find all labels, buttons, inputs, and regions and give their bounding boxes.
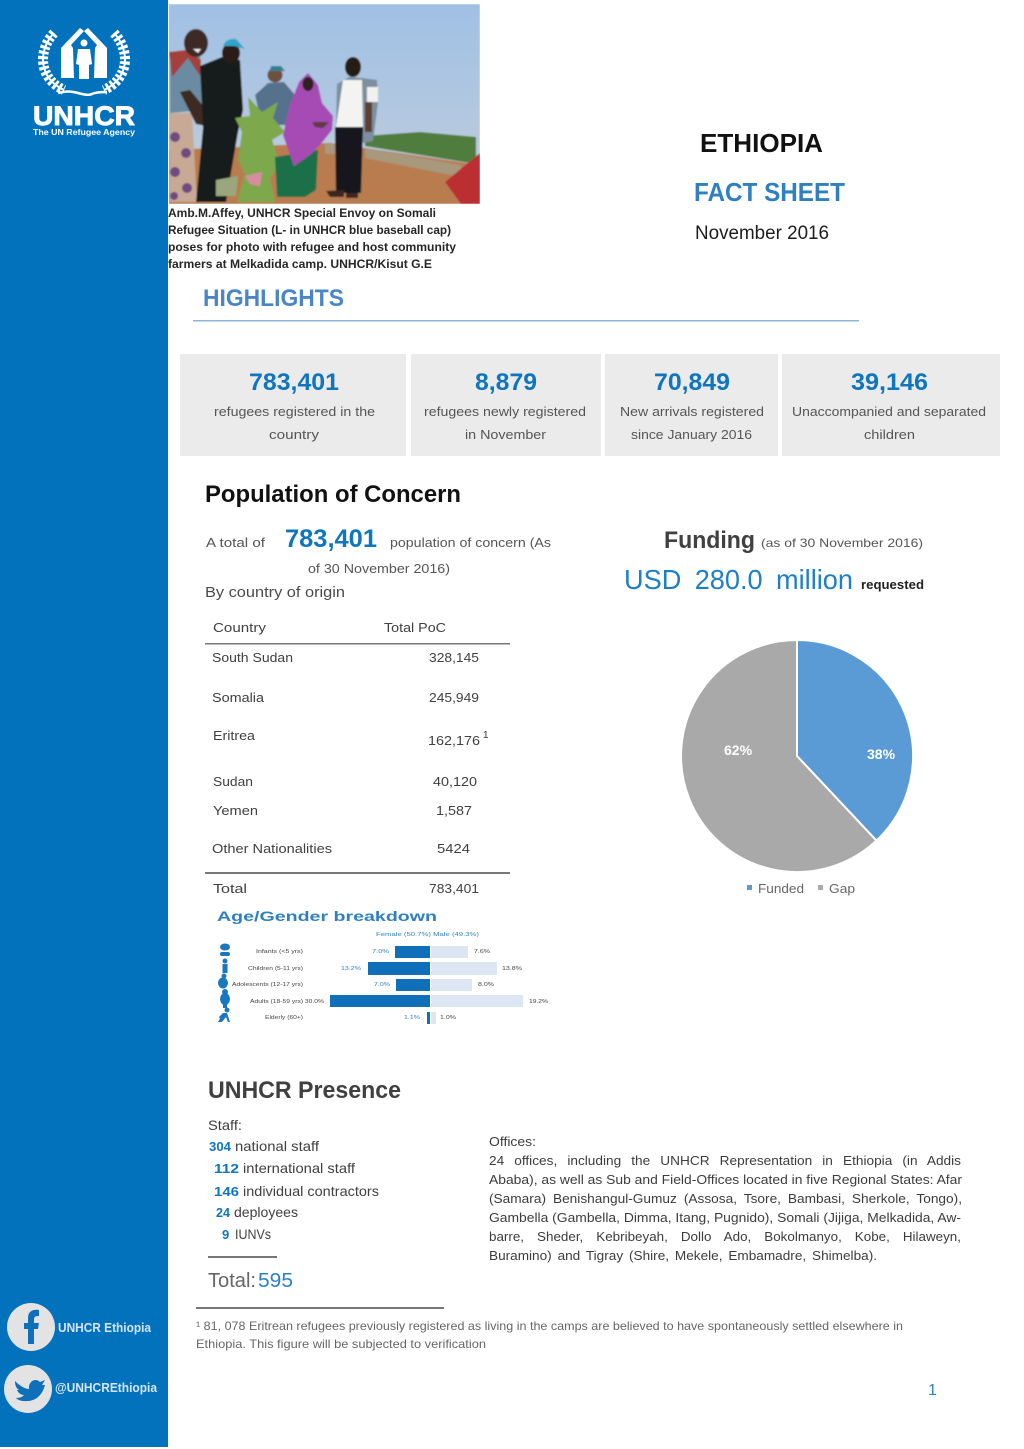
staff total: Total: — [208, 1270, 256, 1292]
table: population by origin: Sudan — [213, 775, 253, 789]
panel: refugees registered: refugees registered in the — [214, 405, 375, 419]
table: population by origin: Total PoC — [384, 621, 446, 635]
staff list: Staff: — [208, 1117, 242, 1133]
photo caption: farmers at Melkadida camp. UNHCR/Kisut G.E — [168, 257, 432, 271]
page number: 1 — [928, 1382, 937, 1399]
label: 38%: 38% — [867, 746, 896, 762]
chart: age gender pyramid: Elderly (60+) — [265, 1015, 303, 1021]
panel: refugees registered: 783,401 — [249, 369, 339, 396]
population total text: 783,401 — [285, 525, 377, 553]
panel: newly registered: refugees newly registered — [424, 405, 586, 419]
icon: UNHCR logo — [33, 28, 136, 137]
staff list: 9 — [222, 1227, 229, 1242]
photo: farmers at Melkadida camp — [168, 4, 480, 204]
panel: unaccompanied children: 39,146 — [851, 369, 928, 396]
panel: refugees registered: country — [269, 428, 320, 442]
staff list: individual contractors — [243, 1183, 379, 1199]
offices text: Ababa), as well as Sub and Field-Offices located in five Regional States: Afar — [489, 1172, 963, 1187]
offices text — [489, 1134, 963, 1263]
pie chart: funding — [681, 640, 913, 872]
panel: unaccompanied children — [782, 354, 1000, 456]
photo caption: Refugee Situation (L- in UNHCR blue baseball cap) — [168, 223, 451, 237]
table: population by origin: 783,401 — [429, 882, 479, 896]
chart: age gender pyramid — [218, 932, 548, 1024]
label: 62%: 62% — [724, 742, 753, 758]
staff list: 304 — [209, 1139, 232, 1154]
ground — [168, 143, 480, 204]
table: population by origin: 40,120 — [433, 775, 477, 789]
social: facebook: UNHCR Ethiopia — [58, 1321, 152, 1335]
panel: newly registered: 8,879 — [475, 369, 537, 396]
logo wordmark: UNHCR — [33, 101, 135, 131]
panel: new arrivals: New arrivals registered — [620, 405, 764, 419]
staff list: deployees — [234, 1204, 298, 1220]
chart: age gender pyramid: 13.2% — [341, 966, 361, 972]
table: population by origin: South Sudan — [212, 651, 293, 665]
staff list: 24 — [216, 1205, 231, 1220]
offices text: Offices: — [489, 1134, 536, 1149]
icon: sheltering hands and family — [61, 28, 107, 79]
offices text: Gambella (Gambella, Dimma, Itang, Pugnido), Somali (Jijiga, Melkadida, Aw- — [489, 1210, 961, 1225]
title: Ethiopia: ETHIOPIA — [700, 128, 823, 158]
heading: population of concern: Population of Concern — [205, 481, 461, 508]
table: population by origin: 1 — [483, 730, 489, 741]
table: population by origin: 5424 — [437, 842, 470, 856]
social: facebook — [7, 1303, 152, 1351]
social: twitter — [4, 1365, 158, 1413]
heading: highlights: HIGHLIGHTS — [203, 285, 344, 312]
panel: unaccompanied children: Unaccompanied and separated — [792, 405, 986, 419]
chart: age gender pyramid: Infants (<5 yrs) — [256, 949, 303, 955]
population total text: of 30 November 2016) — [308, 562, 450, 576]
logo tagline: The UN Refugee Agency — [33, 128, 136, 137]
population total text: A total of — [206, 536, 266, 550]
table: population by origin: Country — [213, 621, 267, 635]
heading: age gender breakdown: Age/Gender breakdown — [217, 908, 437, 924]
photo caption: poses for photo with refugee and host community — [168, 240, 456, 254]
social: twitter: @UNHCREthiopia — [55, 1381, 158, 1395]
panel: newly registered — [411, 354, 601, 456]
staff list: IUNVs — [235, 1226, 271, 1242]
population total text — [206, 525, 551, 576]
chart: age gender pyramid: 13.8% — [502, 966, 522, 972]
woman in purple — [275, 150, 318, 197]
chart legend: Funded — [758, 882, 804, 896]
table: population by origin: Eritrea — [213, 729, 255, 743]
heading: UNHCR presence: UNHCR Presence — [208, 1077, 401, 1104]
table: population by origin: Yemen — [213, 804, 258, 818]
subtitle: fact sheet: FACT SHEET — [694, 177, 845, 207]
chart legend: Gap — [829, 882, 855, 896]
panel: new arrivals — [605, 354, 778, 456]
staff total — [208, 1270, 293, 1292]
sidebar — [0, 0, 168, 1447]
chart: age gender pyramid: 7.0% — [374, 982, 390, 988]
table: population by origin: 162,176 — [428, 734, 480, 748]
staff list: international staff — [243, 1160, 355, 1176]
staff list: national staff — [235, 1138, 319, 1154]
panel: refugees registered — [180, 354, 406, 456]
person 1 — [170, 50, 202, 113]
chart: age gender pyramid: Children (5-11 yrs) — [248, 966, 303, 972]
icon: laurel wreath — [43, 33, 125, 95]
table: population by origin: 1,587 — [436, 804, 472, 818]
seedling plant — [235, 97, 285, 202]
chart: age gender pyramid: Female (50.7%) Male (49.3%) — [376, 932, 479, 938]
population total text: population of concern (As — [390, 536, 551, 550]
table: population by origin: Total — [213, 882, 247, 896]
chart: age gender pyramid: 8.0% — [478, 982, 494, 988]
man in vest — [345, 57, 361, 77]
panel: new arrivals: 70,849 — [654, 369, 730, 396]
table: population by origin — [205, 621, 510, 896]
funding amount: requested — [861, 577, 924, 592]
red cloth — [445, 153, 480, 204]
offices text: 24 offices, including the UNHCR Representation in Ethiopia (in Addis — [489, 1153, 962, 1168]
chart: age gender pyramid: 7.0% — [372, 949, 389, 955]
person 2 — [196, 57, 243, 202]
heading: funding — [664, 527, 923, 554]
chart: age gender pyramid: Adults (18-59 yrs) 30.0% — [250, 999, 324, 1005]
heading: funding: Funding — [664, 527, 755, 554]
chart: age gender pyramid: 1.0% — [440, 1015, 456, 1021]
staff list: 146 — [214, 1184, 239, 1199]
offices text: Buramino) and Tigray (Shire, Mekele, Embamadre, Shimelba). — [489, 1248, 877, 1263]
table: population by origin: 245,949 — [429, 691, 479, 705]
footnote: ¹ 81, 078 Eritrean refugees previously registered as living in the camps are believed to have spontaneously settled elsewhere in — [196, 1319, 903, 1333]
offices text: (Samara) Benishangul-Gumuz (Assosa, Tsore, Bambasi, Sherkole, Tongo), — [489, 1191, 962, 1206]
panel: new arrivals: since January 2016 — [631, 428, 752, 442]
person 3 — [255, 82, 295, 125]
table: population by origin: 328,145 — [429, 651, 479, 665]
photo caption: Amb.M.Affey, UNHCR Special Envoy on Somali — [168, 206, 436, 220]
funding amount: USD 280.0 million — [624, 564, 853, 595]
footnote: Ethiopia. This figure will be subjected to verification — [196, 1337, 486, 1351]
chart: age gender pyramid: 1.1% — [404, 1015, 420, 1021]
footnote — [196, 1307, 903, 1351]
chart: age gender pyramid: 19.2% — [529, 999, 548, 1005]
staff list — [208, 1117, 379, 1258]
chart: age gender pyramid: Adolescents (12-17 yrs) — [232, 982, 303, 988]
icons: age groups — [218, 944, 230, 1022]
staff list: 112 — [214, 1161, 239, 1176]
offices text: barre, Sheder, Kebribeyah, Dollo Ado, Bokolmanyo, Kobe, Hilaweyn, — [489, 1229, 961, 1244]
panel: unaccompanied children: children — [864, 428, 915, 442]
staff total: 595 — [258, 1270, 293, 1292]
chart legend — [747, 882, 855, 896]
heading: funding: (as of 30 November 2016) — [761, 536, 923, 550]
table: population by origin: Other Nationalities — [212, 842, 332, 856]
panel: newly registered: in November — [465, 428, 546, 442]
by country label: By country of origin — [205, 584, 345, 601]
chart: age gender pyramid: 7.6% — [474, 949, 490, 955]
photo caption — [168, 206, 456, 271]
date: November 2016 — [695, 223, 829, 244]
table: population by origin: Somalia — [212, 691, 264, 705]
